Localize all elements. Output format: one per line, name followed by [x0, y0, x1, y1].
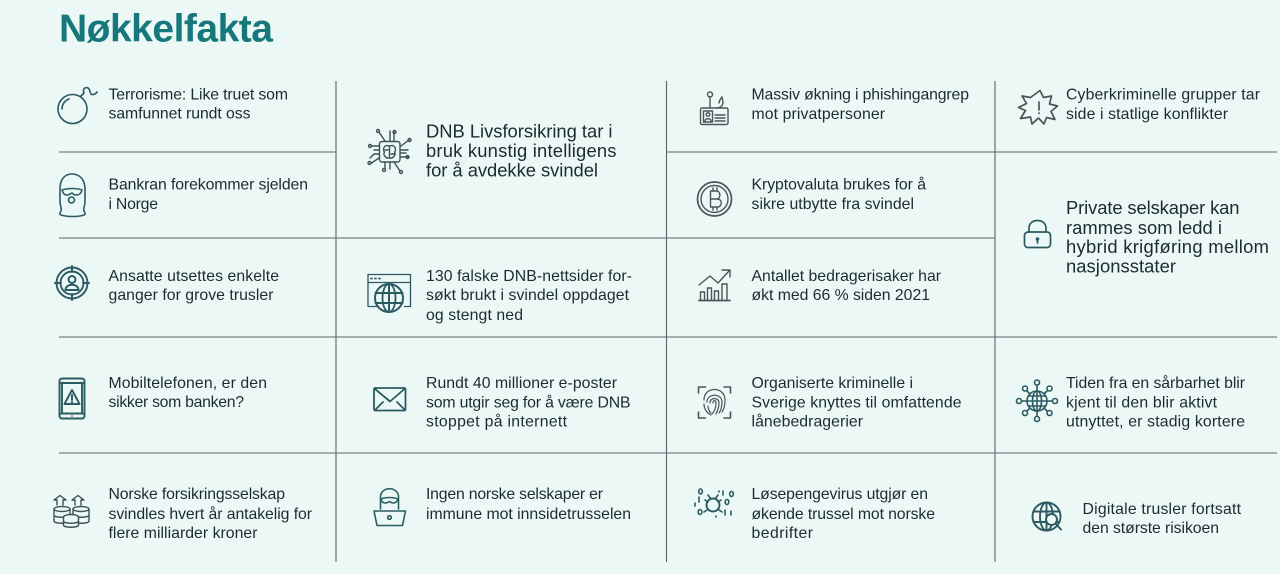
- item: kryptovaluta: [698, 175, 926, 216]
- item: digitale trusler: [1032, 501, 1242, 537]
- item: private selskaper: [1024, 197, 1269, 277]
- text: bankran: i Norge: [108, 196, 158, 213]
- text: private selskaper: [1066, 197, 1269, 277]
- text: bedragerisaker: [752, 268, 941, 304]
- item: phishing: [700, 86, 969, 124]
- text: organiserte kriminelle: Organiserte kriminelle i: [752, 375, 913, 392]
- text: mobil: sikker som banken?: [108, 394, 244, 411]
- text: kryptovaluta: [752, 175, 926, 213]
- title: Nøkkelfakta: [59, 8, 273, 51]
- item: bankran: [60, 174, 308, 216]
- text: terrorisme: [108, 86, 288, 123]
- text: private selskaper: nasjonsstater: [1066, 256, 1176, 277]
- text: e-poster: stoppet på internett: [426, 413, 568, 431]
- icon: coins with arrows: [54, 496, 89, 527]
- item: løsepengevirus: [695, 486, 935, 542]
- text: bankran: Bankran forekommer sjelden: [108, 176, 308, 193]
- item: kunstig intelligens: [368, 120, 616, 181]
- icon: balaclava: [60, 174, 85, 216]
- text: e-poster: [426, 375, 630, 431]
- text: norske forsikring: [108, 486, 312, 542]
- icon: fingerprint scan: [698, 387, 730, 418]
- item: cyberkriminelle: [1018, 86, 1260, 124]
- text: cyberkriminelle: [1066, 86, 1260, 123]
- icon: bomb: [58, 88, 97, 124]
- text: innsidetrussel: Ingen norske selskaper er: [426, 486, 603, 503]
- text: kunstig intelligens: DNB Livsforsikring tar i: [426, 120, 612, 141]
- icon: bitcoin: [698, 182, 732, 216]
- text: phishing: Massiv økning i phishingangrep: [752, 86, 969, 104]
- text: mobil: Mobiltelefonen, er den: [108, 375, 267, 392]
- text: organiserte kriminelle: [752, 375, 962, 431]
- text: private selskaper: Private selskaper kan: [1066, 197, 1240, 218]
- text: norske forsikring: svindles hvert år antakelig for: [108, 505, 312, 523]
- text: kunstig intelligens: bruk kunstig intelligens: [426, 140, 616, 161]
- item: falske nettsider: [368, 268, 632, 324]
- text: falske nettsider: søkt brukt i svindel oppdaget: [426, 287, 630, 304]
- text: falske nettsider: 130 falske DNB-nettsider for-: [426, 268, 632, 285]
- text: norske forsikring: flere milliarder kroner: [108, 525, 258, 542]
- text: norske forsikring: Norske forsikringsselskap: [108, 486, 285, 503]
- text: terrorisme: samfunnet rundt oss: [108, 106, 251, 123]
- text: ansatte: [108, 268, 279, 304]
- text: mobil: [108, 375, 267, 411]
- text: innsidetrussel: immune mot innsidetrusselen: [426, 506, 631, 523]
- item: norske forsikring: [54, 486, 312, 542]
- text: innsidetrussel: [426, 486, 631, 523]
- item: ansatte: [55, 266, 279, 304]
- text: phishing: mot privatpersoner: [752, 106, 885, 123]
- text: løsepengevirus: bedrifter: [752, 525, 813, 542]
- text: bankran: [108, 176, 308, 213]
- text: løsepengevirus: [752, 486, 935, 542]
- icon: padlock: [1024, 220, 1050, 248]
- text: løsepengevirus: økende trussel mot norske: [752, 506, 935, 523]
- item: e-poster: [374, 375, 630, 431]
- icon: starburst alert: [1018, 90, 1058, 124]
- item: mobil: [60, 375, 267, 418]
- icon: phone warning: [60, 378, 84, 418]
- item: innsidetrussel: [374, 486, 631, 526]
- icon: networked globe: [1016, 380, 1058, 422]
- text: cyberkriminelle: side i statlige konflikter: [1066, 106, 1228, 123]
- text: digitale trusler: den største risikoen: [1082, 520, 1219, 537]
- icon: binary bug: [695, 489, 733, 517]
- item: organiserte kriminelle: [698, 375, 962, 431]
- icon: target person: [55, 266, 89, 300]
- text: digitale trusler: [1082, 501, 1242, 537]
- text: sårbarhet: [1066, 374, 1245, 431]
- text: sårbarhet: Tiden fra en sårbarhet blir: [1066, 374, 1245, 392]
- text: private selskaper: hybrid krigføring mellom: [1066, 236, 1269, 257]
- text: falske nettsider: og stengt ned: [426, 307, 523, 324]
- text: organiserte kriminelle: Sverige knyttes til omfattende: [752, 395, 962, 412]
- icon: AI chip: [368, 130, 411, 174]
- text: bedragerisaker: Antallet bedragerisaker har: [752, 268, 941, 285]
- icon: browser globe: [368, 274, 410, 312]
- icon: hacker at laptop: [374, 489, 406, 526]
- text: falske nettsider: [426, 268, 632, 324]
- item: terrorisme: [58, 86, 288, 124]
- text: digitale trusler: Digitale trusler fortsatt: [1082, 501, 1242, 518]
- text: løsepengevirus: Løsepengevirus utgjør en: [752, 486, 928, 503]
- icon: rising chart: [699, 270, 730, 300]
- text: kunstig intelligens: [426, 120, 616, 181]
- item: sårbarhet: [1016, 374, 1245, 431]
- text: ansatte: Ansatte utsettes enkelte: [108, 268, 279, 285]
- text: e-poster: Rundt 40 millioner e-poster: [426, 375, 617, 392]
- text: bedragerisaker: økt med 66 % siden 2021: [752, 287, 930, 304]
- text: terrorisme: Terrorisme: Like truet som: [108, 86, 288, 104]
- text: kunstig intelligens: for å avdekke svindel: [426, 160, 598, 181]
- icon: phishing hook on id card: [700, 92, 728, 124]
- text: e-poster: som utgir seg for å være DNB: [426, 394, 630, 412]
- text: sårbarhet: kjent til den blir aktivt: [1066, 395, 1218, 412]
- text: kryptovaluta: Kryptovaluta brukes for å: [752, 175, 926, 193]
- text: kryptovaluta: sikre utbytte fra svindel: [752, 196, 914, 213]
- text: organiserte kriminelle: lånebedragerier: [752, 413, 863, 431]
- text: sårbarhet: utnyttet, er stadig kortere: [1066, 414, 1245, 431]
- text: phishing: [752, 86, 969, 123]
- item: bedragerisaker: [699, 268, 941, 304]
- text: private selskaper: rammes som ledd i: [1066, 217, 1222, 238]
- text: cyberkriminelle: Cyberkriminelle grupper tar: [1066, 86, 1260, 104]
- text: ansatte: ganger for grove trusler: [108, 287, 274, 304]
- icon: globe with magnifier: [1032, 502, 1061, 530]
- icon: envelope: [374, 388, 406, 410]
